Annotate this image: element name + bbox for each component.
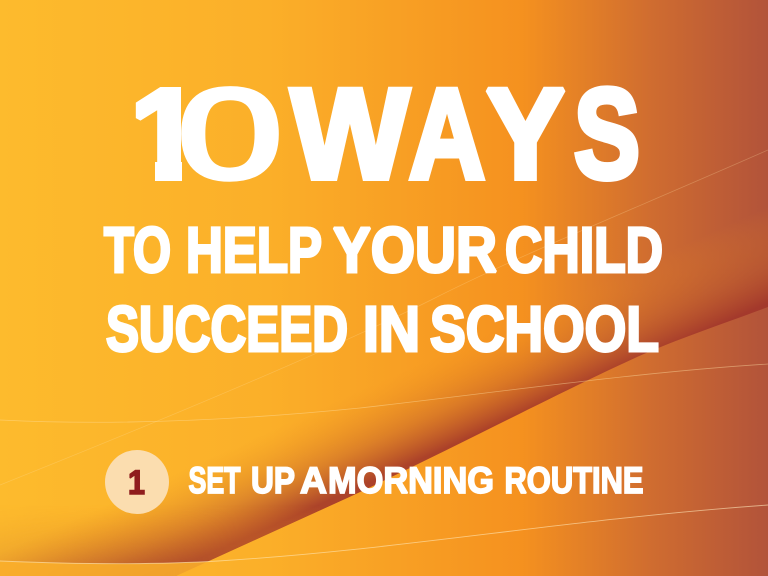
lower right wave <box>176 505 768 576</box>
subtitle line 1: CHILD <box>505 214 663 286</box>
lower left shadow <box>0 516 306 564</box>
tip heading <box>188 460 644 501</box>
thin bottom curve <box>0 505 768 564</box>
subtitle line 2: IN <box>363 293 420 365</box>
tip heading: SET <box>188 460 241 501</box>
subtitle line 1: TO <box>104 214 171 286</box>
title: 10 ways: W <box>291 63 409 206</box>
subtitle line 1: YOUR <box>333 214 497 286</box>
number badge <box>105 450 169 514</box>
title: 10 ways: 1 <box>130 63 202 206</box>
subtitle line 1 <box>104 214 663 286</box>
tip heading: A <box>300 460 327 501</box>
title: 10 ways: Y <box>486 63 565 206</box>
tip heading: ROUTINE <box>504 460 644 501</box>
subtitle line 1: HELP <box>186 214 322 286</box>
title: 10 ways: 0 <box>178 63 282 206</box>
tip heading: MORNING <box>328 460 494 501</box>
subtitle line 2: SUCCEED <box>106 293 348 365</box>
tip heading: UP <box>251 460 295 501</box>
thin diagonal line <box>0 150 768 485</box>
title: 10 ways: S <box>574 63 640 206</box>
subtitle line 2: SCHOOL <box>430 293 659 365</box>
number badge: 1 <box>128 464 145 502</box>
diagonal shadow band <box>24 238 768 576</box>
title: 10 ways <box>136 85 638 182</box>
thin curved line upper <box>0 364 768 422</box>
lower left wedge below curve <box>0 561 218 576</box>
subtitle line 2 <box>106 293 659 365</box>
title: 10 ways: A <box>409 63 485 206</box>
